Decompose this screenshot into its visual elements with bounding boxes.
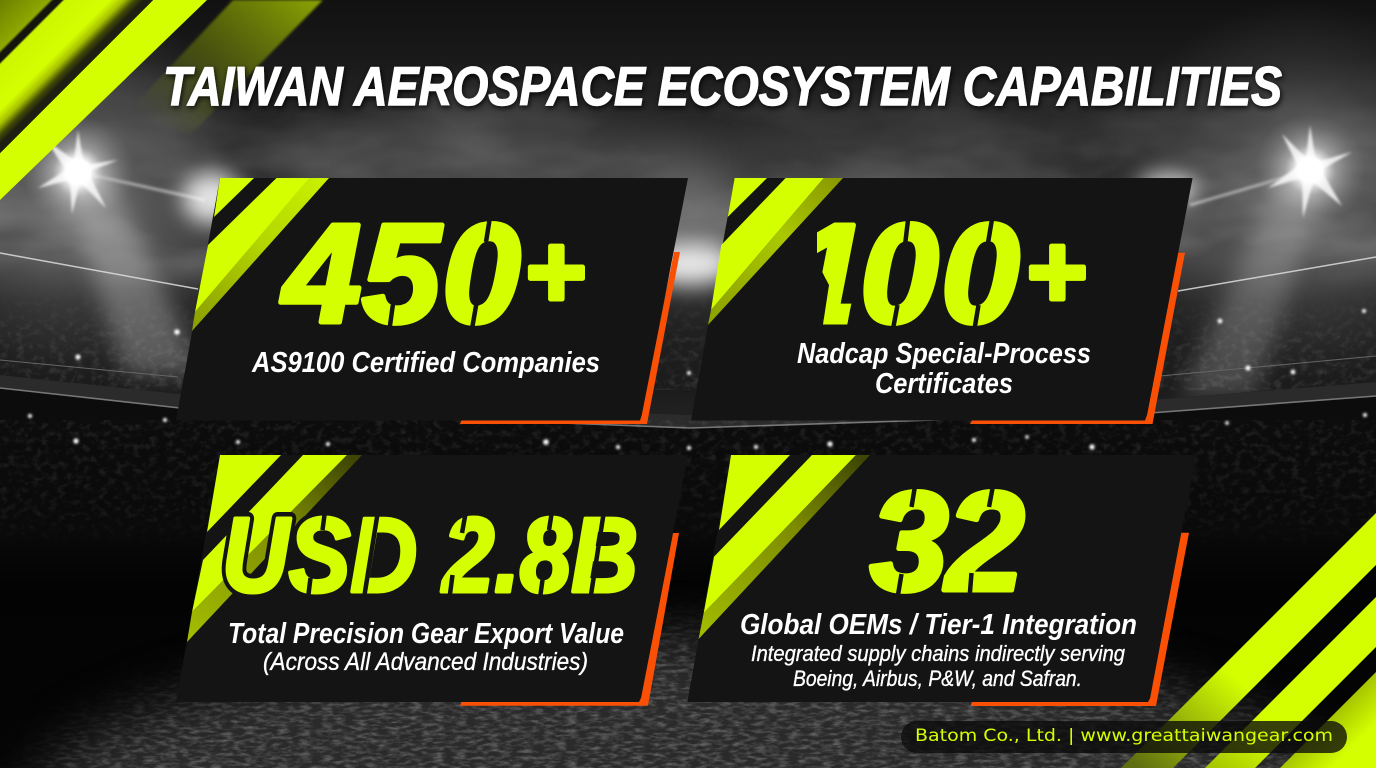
big number: 100+: [817, 221, 1086, 326]
card accent: orange corner: [971, 533, 1189, 706]
label: Nadcap Special-Process Certificates: [797, 338, 1091, 400]
label: Global OEMs / Tier-1 Integration: Global OEMs / Tier-1 Integration: [740, 609, 1137, 641]
card background: [176, 178, 688, 420]
label: Total Precision Gear Export Value: [228, 618, 624, 676]
big number: 450+: +: [524, 214, 585, 330]
card stripes: [699, 455, 870, 639]
big number: 100+: 1: [789, 194, 867, 352]
card stripes: [192, 178, 329, 331]
panel: 100+ Nadcap special-process certificates: [691, 178, 1193, 424]
label: AS9100 Certified Companies: AS9100 Certified Companies: [251, 347, 600, 379]
big number: 100+: +: [1025, 214, 1086, 330]
stripes: top-left corner: [0, 0, 323, 200]
card accent: orange corner: [460, 533, 679, 706]
description: OEM supply chains: [751, 641, 1126, 691]
big number: USD 2.8B: USD 2.8B: [222, 496, 638, 614]
panel: 32 global OEMs: [687, 455, 1196, 706]
panel: 450+ AS9100 certified companies: [176, 178, 688, 424]
footer: company name and website: Batom Co., Ltd. | www.greattaiwangear.com: [915, 726, 1333, 746]
card background: [687, 455, 1196, 702]
label: Total Precision Gear Export Value: Total Precision Gear Export Value: [228, 618, 624, 650]
card accent: orange corner: [460, 252, 680, 424]
big number: 32: 32: [870, 462, 1024, 620]
label: Total Precision Gear Export Value: (Across All Advanced Industries): [263, 648, 588, 676]
label: Nadcap Special-Process Certificates: Nadcap Special-Process: [797, 338, 1091, 370]
card stripes: [708, 178, 843, 325]
description: OEM supply chains: Integrated supply chains indirectly serving: [751, 641, 1126, 666]
big number: 450+: 450: [280, 194, 520, 352]
footer: company name and website: [901, 721, 1347, 753]
stripes: bottom-right corner: [1121, 513, 1376, 768]
big number: 100+: 00: [860, 194, 1019, 352]
big number: USD 2.8B: USD 2.8B: [222, 496, 638, 614]
card accent: orange corner: [970, 253, 1185, 424]
description: OEM supply chains: Boeing, Airbus, P&W, and Safran.: [793, 666, 1082, 691]
card background: [691, 178, 1193, 420]
card background: [176, 455, 688, 702]
card stripes: [187, 455, 362, 642]
label: Nadcap Special-Process Certificates: Certificates: [875, 368, 1013, 400]
panel: USD 2.8B export value: [176, 455, 688, 706]
